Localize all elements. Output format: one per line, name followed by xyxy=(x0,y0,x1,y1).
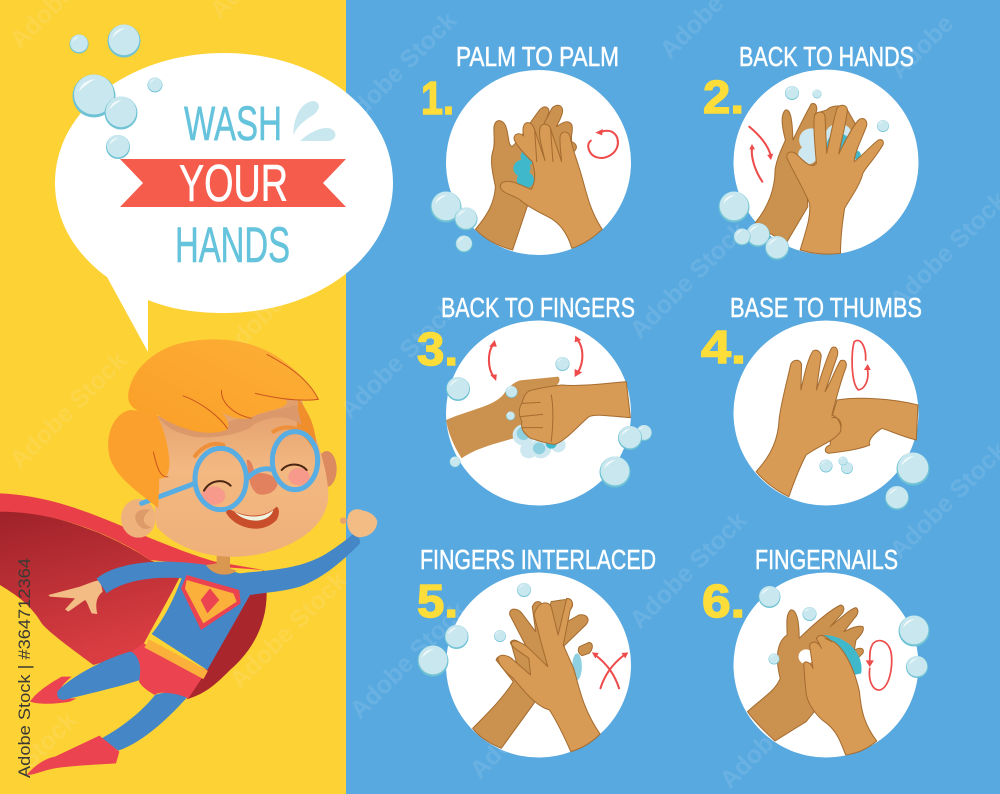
white circle xyxy=(446,572,631,758)
stock watermarks: Adobe Stock xyxy=(624,216,752,344)
ear: left xyxy=(121,499,156,538)
heading: FINGERS INTERLACED xyxy=(420,544,656,575)
speech bubble with title xyxy=(55,53,393,352)
hands xyxy=(446,377,630,458)
number: 4. xyxy=(701,321,746,373)
soap bubbles xyxy=(820,452,930,510)
hands xyxy=(475,105,602,250)
stock watermarks: Adobe Stock xyxy=(344,596,472,724)
panel 6: fingernails xyxy=(702,544,930,758)
stock watermarks: Adobe Stock xyxy=(224,566,352,694)
soap bubbles around speech bubble xyxy=(70,24,162,159)
stock watermarks: Stock xyxy=(14,706,82,774)
soap bubbles xyxy=(446,357,652,488)
number: 5. xyxy=(417,575,458,627)
white circle xyxy=(446,320,631,506)
torso and raised arm xyxy=(97,530,360,670)
neck xyxy=(206,553,237,575)
hands xyxy=(755,104,883,254)
soap bubbles xyxy=(718,86,889,260)
front leg and boot xyxy=(27,692,189,775)
face xyxy=(152,397,328,557)
hands xyxy=(748,605,877,755)
cheeks xyxy=(201,486,225,505)
soap bubbles xyxy=(418,583,531,676)
panel 3: back to fingers xyxy=(417,292,652,506)
glasses xyxy=(195,432,318,510)
stock watermarks: Adobe Stock xyxy=(334,296,462,424)
panel 5: fingers interlaced xyxy=(417,544,656,758)
shorts xyxy=(132,643,207,698)
soap bubbles xyxy=(430,192,478,252)
arm and hand: left xyxy=(48,580,103,614)
belt xyxy=(147,643,206,675)
eyebrows xyxy=(195,444,223,456)
number: 1. xyxy=(421,72,454,124)
red ribbon xyxy=(120,159,346,207)
number: 3. xyxy=(417,323,458,375)
glasses arm xyxy=(142,483,195,503)
side hair lobe xyxy=(108,410,169,508)
stock watermarks: Adobe Stock xyxy=(464,656,592,784)
heading: BACK TO HANDS xyxy=(739,41,914,72)
heading: FINGERNAILS xyxy=(755,544,898,575)
crossing arrows xyxy=(592,652,628,688)
splash droplets xyxy=(293,101,335,141)
bubble shape xyxy=(55,53,393,352)
heading: BACK TO FINGERS xyxy=(441,292,635,323)
rotation arrow xyxy=(588,129,618,158)
white circle xyxy=(734,320,918,506)
white circle xyxy=(734,70,918,254)
stock watermarks: Adobe Stock xyxy=(4,346,132,474)
superhero boy character xyxy=(0,339,377,775)
stock watermarks: Adobe Stock xyxy=(214,236,342,364)
number: 2. xyxy=(703,71,744,123)
rotation arrow xyxy=(866,641,892,690)
title word: YOUR: YOUR xyxy=(179,155,288,213)
white circle xyxy=(446,70,631,255)
yellow left panel xyxy=(0,0,346,794)
stock watermarks: Adobe xyxy=(884,9,959,84)
eyes xyxy=(204,481,231,491)
heading: BASE TO THUMBS xyxy=(730,292,922,323)
stock watermarks: Adobe Stock xyxy=(624,506,752,634)
panel 1: palm to palm xyxy=(421,41,631,255)
hair top xyxy=(128,339,318,433)
number: 6. xyxy=(702,575,745,627)
cape xyxy=(0,493,267,699)
back leg and boot xyxy=(30,652,141,704)
fist xyxy=(340,509,377,537)
chest emblem xyxy=(181,575,241,630)
rotation arrows xyxy=(749,127,773,182)
soap bubbles xyxy=(758,586,930,678)
right hair strip xyxy=(297,398,317,455)
mouth xyxy=(226,507,279,529)
head xyxy=(108,339,337,557)
nose xyxy=(247,460,277,495)
forelock shadow xyxy=(157,405,302,437)
hands xyxy=(756,347,918,497)
heading: PALM TO PALM xyxy=(456,41,619,72)
rotation arrow xyxy=(852,340,871,390)
stock watermarks: Adobe Stock xyxy=(714,666,842,794)
panel 4: base to thumbs xyxy=(701,292,930,510)
hands xyxy=(473,598,600,752)
white circle xyxy=(734,572,918,758)
stock watermarks: Adobe Stock xyxy=(334,6,462,134)
title word: WASH: WASH xyxy=(184,98,282,151)
title word: HANDS: HANDS xyxy=(175,217,290,273)
direction arrows xyxy=(489,336,582,381)
hair strands xyxy=(153,354,318,477)
stock id text: Adobe Stock | #364712364 xyxy=(15,558,34,778)
panel 2: back to hands xyxy=(703,41,918,260)
ear: right xyxy=(317,451,337,487)
